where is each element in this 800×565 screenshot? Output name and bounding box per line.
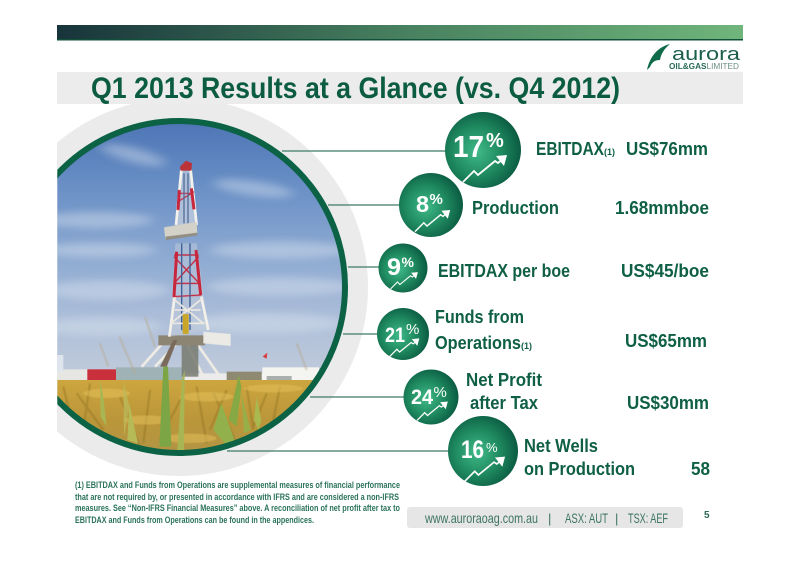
grass blades (100, 367, 261, 450)
badge 16%: 16 (461, 436, 484, 464)
footer separator: | (548, 511, 551, 526)
photo ring: grey backdrop (57, 104, 368, 476)
label line 2: Operations (435, 333, 521, 353)
tower upper lattice (177, 170, 195, 226)
metric: EBITDAX +17% (445, 112, 708, 188)
label line 1: Net Profit (466, 370, 542, 390)
badge 24%: 24 (411, 386, 433, 409)
metric: EBITDAX per boe +9% (378, 244, 709, 292)
page number: 5 (704, 510, 710, 521)
footnote: EBITDAX and Funds from Operations can be found in the appendices. (75, 514, 314, 525)
label line 1: Net Wells (524, 436, 598, 456)
blurred foreground stalks (100, 317, 307, 373)
title band (57, 72, 743, 104)
badge 16%: % (486, 440, 498, 455)
footer TSX ticker: TSX: AEF (628, 510, 668, 526)
footnote (75, 479, 400, 525)
logo: Aurora Oil &amp; Gas (647, 44, 741, 71)
badge 8%: % (430, 191, 443, 208)
badge 17%: % (486, 130, 504, 152)
badge 24%: % (434, 384, 447, 401)
footer website: www.auroraoag.com.au (424, 510, 538, 526)
title: Q1 2013 Results at a Glance (vs. Q4 2012) (91, 72, 620, 105)
wheat field (57, 380, 313, 450)
photo: drilling rig in a field (13, 120, 353, 460)
metric: Funds from Operations +21% (377, 307, 707, 360)
label: EBITDAX per boe (438, 261, 570, 281)
value: 58 (691, 459, 710, 479)
rig tower (142, 161, 231, 377)
connector lines (227, 151, 449, 451)
logo tagline: OIL&GASLIMITED (669, 62, 739, 71)
footnote: that are not required by, or presented in accordance with IFRS and are considered a non-IFRS (75, 491, 399, 502)
label line 2: on Production (524, 459, 635, 479)
label: EBITDAX (536, 139, 604, 159)
badge 9% (378, 244, 428, 292)
badge 9%: % (402, 254, 414, 270)
label line 2: after Tax (470, 393, 538, 413)
value: US$76mm (626, 139, 708, 159)
badge 21%: 21 (385, 324, 405, 347)
metric: Production +8% (399, 173, 709, 237)
logo wordmark: aurora (672, 44, 741, 64)
value: US$30mm (627, 393, 709, 413)
footnote: measures. See “Non-IFRS Financial Measures” above. A reconciliation of net profit after tax to (75, 502, 400, 513)
badge 8% (399, 173, 463, 237)
label: Production (472, 198, 559, 218)
top gradient bar (57, 25, 743, 40)
metric: Net Profit after Tax +24% (404, 370, 709, 424)
value: US$45/boe (621, 261, 709, 281)
badge 21% (377, 308, 429, 360)
badge 8%: 8 (416, 191, 429, 217)
badge 9%: 9 (387, 254, 401, 281)
footer ASX ticker: ASX: AUT (565, 510, 608, 526)
badge 17%: 17 (453, 129, 484, 164)
badge 24% (404, 370, 458, 424)
sky (40, 120, 350, 373)
footer separator: | (615, 511, 618, 526)
footer pill (407, 507, 683, 528)
badge 16% (448, 416, 518, 486)
horizon buildings (57, 353, 319, 381)
rig base (140, 345, 220, 374)
tower lower lattice (170, 243, 205, 336)
green photo border (57, 118, 348, 456)
clouds (40, 139, 353, 336)
icon: logo swoosh (647, 44, 670, 70)
footnote marker: (1) (521, 341, 532, 351)
value: 1.68mmboe (615, 198, 709, 218)
footnote: (1) EBITDAX and Funds from Operations are supplemental measures of financial performance (75, 479, 400, 490)
footnote marker: (1) (604, 147, 615, 157)
label line 1: Funds from (435, 307, 524, 327)
value: US$65mm (625, 331, 707, 351)
badge 21%: % (406, 321, 419, 338)
metric: Net Wells on Production +16% (448, 416, 710, 486)
badge 17% (445, 112, 521, 188)
